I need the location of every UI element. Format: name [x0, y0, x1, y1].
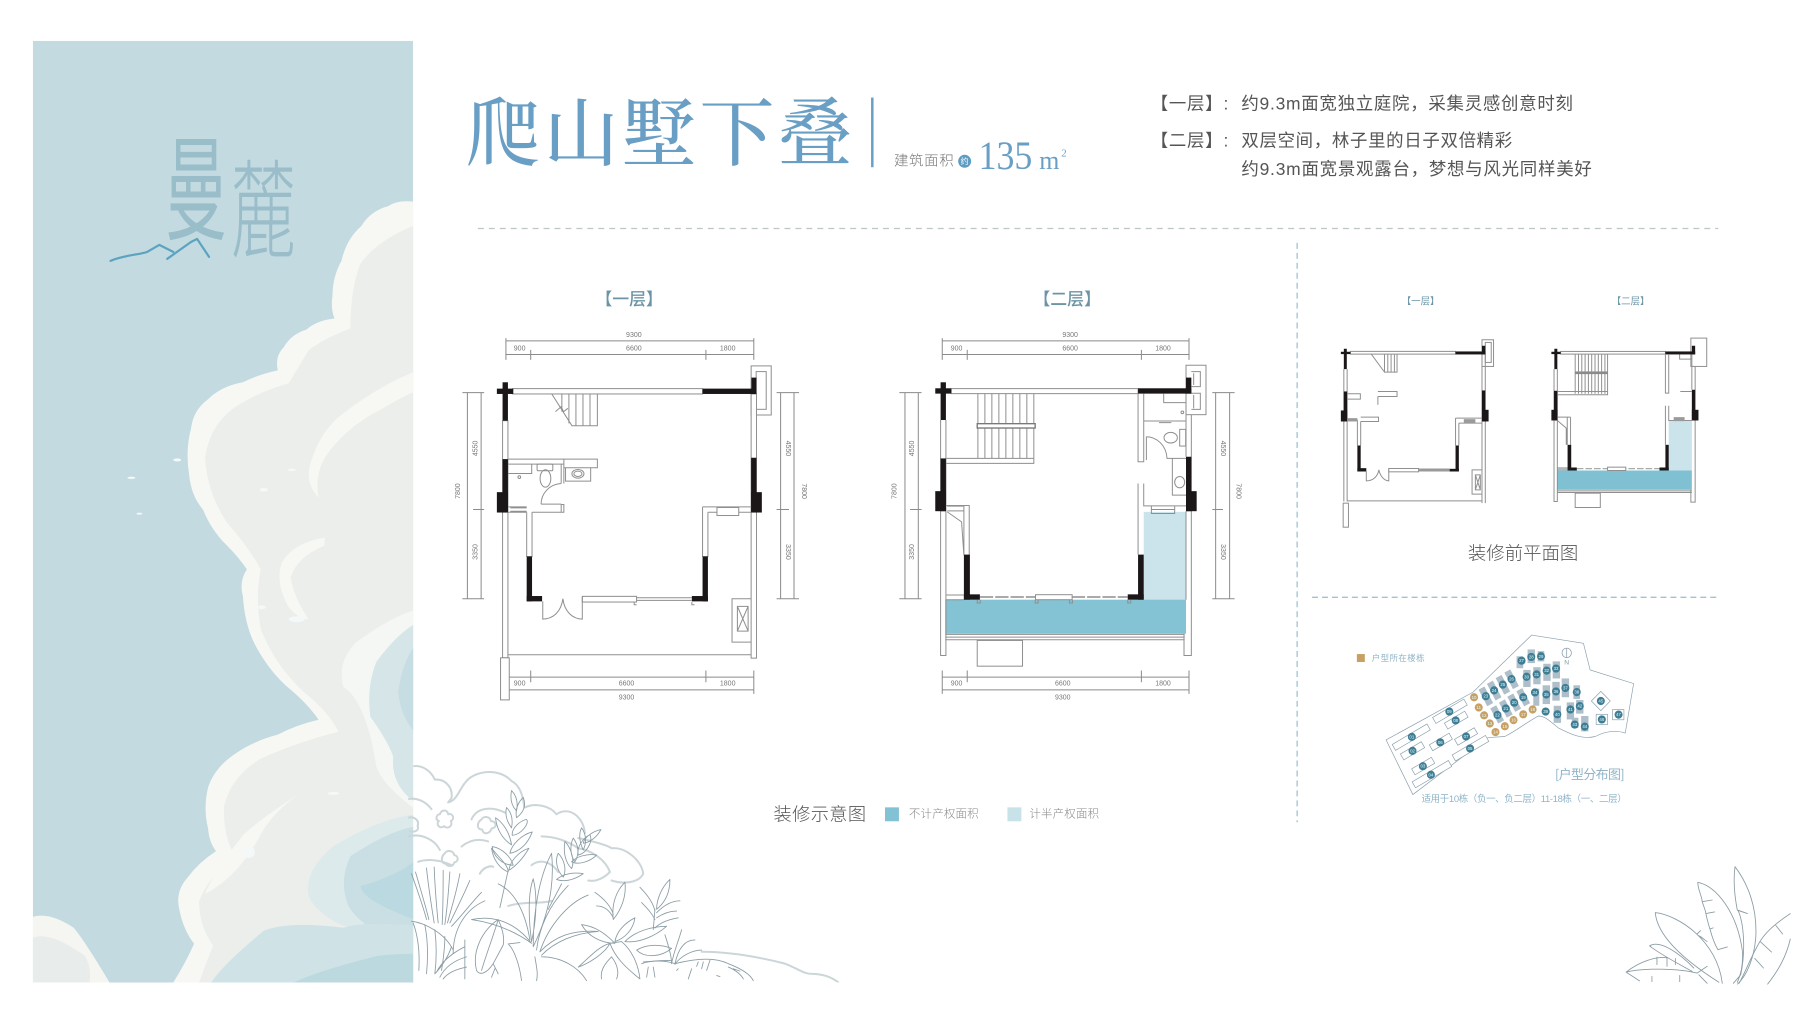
dimensions: 6600 [1062, 346, 1078, 353]
building numbers: 04 [1429, 772, 1434, 777]
building numbers: 11 [1476, 705, 1482, 710]
dimensions: 900 [514, 680, 526, 687]
building numbers: 22 [1495, 712, 1500, 718]
legend: renovation diagram [774, 800, 1099, 826]
floor 2 description [1151, 130, 1592, 179]
building numbers: 23 [1483, 694, 1489, 699]
building numbers: 45 [1598, 698, 1604, 704]
building numbers: 20 [1512, 700, 1517, 705]
legend: unit location: 户型所在楼栋 [1372, 653, 1425, 663]
illustration: drifting specks [127, 458, 339, 858]
building numbers: 39 [1543, 709, 1549, 714]
area label: 建筑面积 [894, 149, 954, 170]
floor plan: level 2 [891, 332, 1241, 701]
dimensions: 6600 [1055, 680, 1071, 687]
building numbers: 21 [1503, 706, 1509, 711]
building numbers: 41 [1568, 707, 1573, 712]
dimensions: 900 [951, 346, 963, 353]
logo: brand mark [111, 100, 296, 280]
site boundary [1386, 635, 1634, 795]
building numbers: 03 [1420, 764, 1426, 769]
building numbers: 15 [1502, 724, 1508, 729]
small plan: original level 2 [1551, 338, 1707, 508]
logo: mountain line [111, 239, 209, 261]
dimensions: 9300 [619, 694, 634, 701]
area fill: half-counted terrace [1144, 512, 1186, 600]
title divider [871, 98, 874, 167]
building numbers: 38 [1574, 690, 1580, 695]
building numbers: 31 [1534, 672, 1540, 677]
dimensions: 9300 [1062, 332, 1078, 339]
illustration: foliage line art bottom right [1626, 867, 1790, 984]
small heading: floor 2: 【二层】 [1612, 294, 1650, 308]
building numbers: 17 [1521, 712, 1526, 717]
dimensions [891, 332, 1241, 701]
floor 2 description: : [1223, 130, 1228, 150]
fern and foreground leaves [595, 879, 680, 930]
building numbers: 02 [1410, 748, 1415, 753]
approx badge: 约 [961, 156, 969, 166]
legend swatch: uncounted [885, 807, 899, 821]
flower outlines [408, 810, 496, 866]
divider: dashed lines [478, 228, 1718, 822]
dimensions: 1800 [720, 346, 736, 353]
approx badge [958, 155, 971, 168]
dimensions [455, 332, 807, 701]
stair landing bar [977, 424, 1035, 428]
building numbers [1409, 654, 1622, 777]
building numbers: 16 [1511, 718, 1516, 723]
dimensions: 900 [514, 346, 526, 353]
dimensions: 900 [951, 680, 963, 687]
dimensions: 4550 [784, 441, 791, 456]
small plan: original level 1 [1341, 340, 1494, 527]
building numbers: 05 [1468, 746, 1473, 751]
building numbers: 40 [1555, 712, 1560, 717]
dimensions: 7800 [1234, 483, 1241, 499]
building blocks [1392, 649, 1624, 788]
dimensions: 1800 [1155, 346, 1171, 353]
building numbers: 25 [1500, 682, 1506, 687]
legend swatch: half-counted [1007, 807, 1021, 821]
building numbers: 12 [1482, 713, 1487, 718]
floor 1 description: 约9.3m面宽独立庭院，采集灵感创意时刻 [1241, 94, 1573, 114]
building numbers: 07 [1464, 734, 1469, 739]
building markers [1408, 652, 1623, 779]
area fill: uncounted terrace [945, 600, 1186, 634]
site distribution map [1386, 635, 1634, 795]
utility box [732, 599, 751, 642]
dimensions: 4550 [472, 441, 479, 456]
right fronds [1739, 914, 1790, 984]
building numbers: 14 [1493, 730, 1498, 735]
banana leaf [475, 920, 587, 981]
dimensions: 3350 [1219, 544, 1226, 560]
heading: floor 1: 【一层】 [595, 285, 663, 310]
building numbers: 10 [1472, 695, 1477, 700]
building numbers: 36 [1554, 689, 1559, 694]
building numbers: 43 [1572, 722, 1578, 727]
area number: 2 [1061, 147, 1067, 159]
building numbers: 08 [1453, 718, 1459, 723]
building numbers: 26 [1509, 677, 1514, 682]
dimensions: 3350 [784, 544, 791, 560]
building numbers: 19 [1521, 695, 1526, 700]
area number: m [1039, 146, 1059, 175]
area number [979, 134, 1067, 178]
illustration: foliage line art bottom [408, 766, 838, 982]
fan palm [411, 867, 485, 979]
building numbers: 06 [1438, 740, 1443, 745]
floor plan: level 1 [455, 332, 807, 701]
floor 1 description: : [1223, 94, 1228, 114]
building numbers: 46 [1599, 717, 1605, 722]
logo glyph: first character: 曼 [165, 100, 227, 265]
building numbers: 24 [1492, 688, 1497, 693]
panel: left sky with clouds [33, 41, 418, 983]
illustration: main cloud [173, 201, 418, 983]
building numbers: 01 [1409, 734, 1415, 739]
building numbers: 37 [1563, 685, 1568, 691]
spiky leaves [472, 853, 598, 955]
small leaves [1626, 944, 1707, 983]
dimensions: 1800 [720, 680, 736, 687]
building numbers: 18 [1530, 707, 1536, 712]
floor 2 description: 【二层】 [1151, 130, 1222, 150]
north arrow [1562, 648, 1571, 666]
background cloud outlines [408, 766, 643, 906]
building numbers: 29 [1539, 654, 1544, 659]
second leaf [1698, 882, 1743, 982]
bathroom fixtures [508, 459, 597, 512]
walls [497, 366, 771, 700]
building numbers: 34 [1533, 690, 1538, 695]
north arrow: N [1564, 659, 1569, 666]
caption: pre-renovation plan: 装修前平面图 [1468, 540, 1578, 566]
dimensions: 4550 [1219, 441, 1226, 456]
logo glyph: second character: 麓 [231, 127, 296, 280]
dimensions: 3350 [472, 544, 479, 560]
building numbers: 42 [1577, 704, 1583, 709]
bathroom fixtures [1144, 394, 1186, 495]
legend title: 装修示意图 [774, 800, 866, 826]
building numbers: 47 [1616, 712, 1622, 717]
building numbers: 33 [1554, 666, 1559, 671]
dimensions: 7800 [800, 483, 807, 499]
dimensions: 9300 [1055, 694, 1071, 701]
description text [1151, 94, 1592, 179]
dimensions: 6600 [619, 680, 634, 687]
heading: floor 2: 【二层】 [1033, 285, 1101, 310]
dimensions: 3350 [909, 544, 916, 560]
floor 2 description: 双层空间，林子里的日子双倍精彩 [1241, 130, 1512, 150]
title: 爬山墅下叠 [466, 74, 852, 181]
dimensions: 6600 [626, 346, 642, 353]
building numbers: 35 [1544, 692, 1549, 697]
dimensions: 4550 [909, 440, 916, 456]
dimensions: 1800 [1155, 680, 1171, 687]
building numbers: 44 [1582, 724, 1588, 729]
stairs [552, 394, 597, 426]
building numbers: 30 [1524, 674, 1530, 679]
illustration: blue cloud shading [211, 609, 418, 983]
area number: 135 [979, 134, 1032, 178]
legend label: half-counted: 计半产权面积 [1029, 805, 1099, 821]
map caption: [户型分布图] [1555, 764, 1625, 783]
building numbers: 13 [1487, 721, 1493, 726]
building numbers: 28 [1529, 654, 1534, 659]
ground mound and grass [702, 952, 838, 982]
building numbers: 09 [1447, 709, 1452, 714]
legend label: uncounted: 不计产权面积 [909, 805, 979, 821]
map applicability note: 适用于10栋（负一、负二层）11-18栋（一、二层） [1422, 793, 1627, 805]
broad leaf [1655, 913, 1722, 983]
dimensions: 9300 [626, 332, 642, 339]
heliconia stalks [492, 791, 532, 908]
dimensions: 7800 [455, 483, 462, 499]
floor 2 description: 约9.3m面宽景观露台，梦想与风光同样美好 [1241, 159, 1592, 179]
dimensions: 7800 [891, 483, 898, 499]
illustration: small bottom-left cloud [33, 916, 110, 983]
walls [935, 365, 1206, 666]
floor 1 description: 【一层】 [1151, 94, 1222, 114]
small heading: floor 1: 【一层】 [1402, 294, 1439, 308]
building numbers: 32 [1544, 668, 1550, 673]
building numbers: 27 [1519, 658, 1525, 663]
stairs [946, 394, 1034, 463]
tall leaf [1733, 867, 1756, 984]
